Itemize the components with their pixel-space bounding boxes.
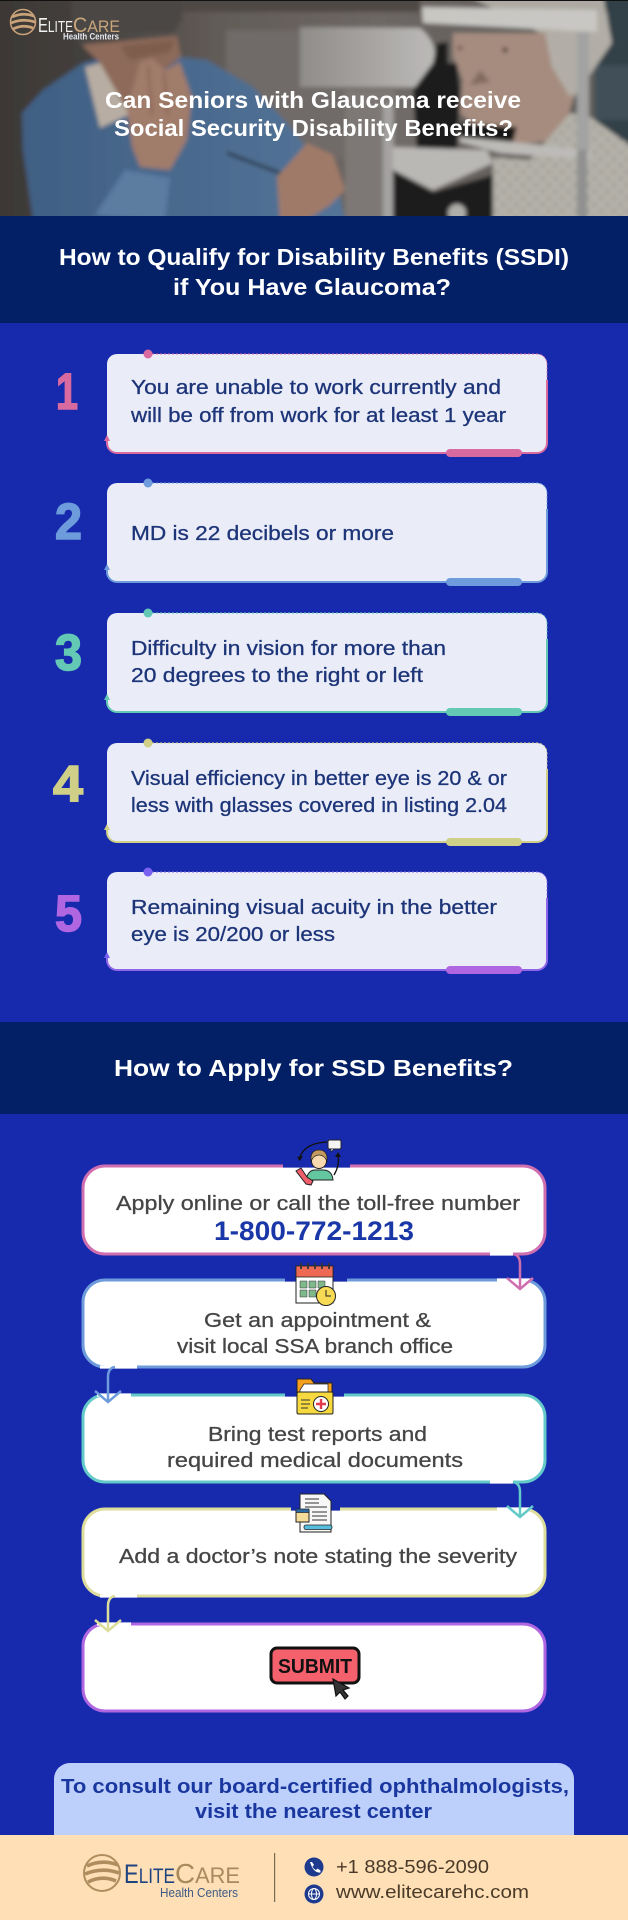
arrow: step 3 to step 4 — [507, 1482, 533, 1517]
qualification 2: 2 — [55, 493, 82, 550]
qualification 4: less with glasses covered in listing 2.04 — [131, 795, 507, 817]
qualification 2: MD is 22 decibels or more — [131, 523, 394, 545]
qualification 3: 20 degrees to the right or left — [131, 665, 423, 687]
man sweater — [22, 50, 345, 221]
step 3: documents: Bring test reports and — [208, 1423, 427, 1446]
step 4: doctor's note — [83, 1494, 545, 1596]
footer logo: CARE — [175, 1858, 240, 1889]
tube — [300, 27, 435, 87]
qualification 5: Remaining visual acuity in the better — [131, 897, 497, 919]
qualification 4: 4 — [53, 755, 84, 812]
icon: call agent — [296, 1140, 341, 1185]
woman face — [453, 33, 577, 146]
header photo banner — [0, 0, 628, 222]
step 2: appointment — [83, 1263, 545, 1367]
step 5: submit — [83, 1624, 545, 1711]
woman hair — [467, 0, 612, 100]
header logo: ELITE — [38, 15, 73, 37]
footer: www.elitecarehc.com — [335, 1882, 529, 1902]
qualification 1: will be off from work for at least 1 year — [130, 405, 506, 427]
footer: +1 888-596-2090 — [336, 1857, 489, 1877]
section band: how to qualify: if You Have Glaucoma? — [173, 274, 451, 300]
man hand at face — [127, 58, 192, 170]
step 1: apply — [83, 1140, 545, 1254]
section band: how to apply — [0, 1022, 628, 1114]
qualification 5 — [55, 868, 547, 974]
icon: calendar — [296, 1263, 336, 1306]
qualification 2 — [55, 478, 547, 586]
call to action box: To consult our board-certified ophthalmologists, — [61, 1775, 569, 1798]
header logo — [10, 10, 120, 42]
woman shirt — [493, 113, 628, 221]
qualification 4 — [53, 738, 547, 846]
footer logo — [84, 1855, 240, 1900]
title: Social Security Disability Benefits? — [114, 115, 513, 141]
qualification 4: Visual efficiency in better eye is 20 & or — [131, 768, 507, 790]
title — [105, 87, 521, 141]
qualification 1: You are unable to work currently and — [131, 377, 501, 399]
footer logo: ELITE — [124, 1859, 175, 1889]
section band: how to qualify: How to Qualify for Disability Benefits (SSDI) — [59, 244, 569, 270]
icon: submit button — [271, 1648, 359, 1699]
footer logo: Health Centers — [160, 1886, 238, 1900]
call to action box — [54, 1763, 574, 1835]
qualification 3: 3 — [55, 624, 82, 681]
header logo: CARE — [73, 14, 120, 37]
icon: submit button: SUBMIT — [278, 1656, 352, 1678]
step 2: appointment: visit local SSA branch office — [177, 1335, 453, 1358]
icon: phone — [304, 1858, 324, 1876]
footer — [0, 1835, 628, 1920]
section band: how to qualify — [0, 216, 628, 323]
step 2: appointment: Get an appointment & — [204, 1309, 431, 1332]
arrow: step 2 to step 3 — [95, 1367, 121, 1402]
qualification 3 — [55, 608, 547, 716]
qualification 5: 5 — [55, 885, 82, 942]
qualification 1: 1 — [56, 363, 78, 420]
step 3: documents — [83, 1379, 545, 1482]
icon: medical folder — [297, 1379, 333, 1414]
arrow: step 1 to step 2 — [507, 1254, 533, 1289]
right background — [597, 0, 628, 155]
step 4: doctor's note: Add a doctor’s note stating the severity — [119, 1545, 518, 1568]
man head — [80, 36, 181, 110]
icon: doctor's note — [296, 1494, 332, 1532]
step 1: apply: 1-800-772-1213 — [214, 1216, 414, 1246]
section band: how to apply: How to Apply for SSD Benefits? — [114, 1055, 513, 1081]
call to action box: visit the nearest center — [195, 1800, 432, 1823]
step 1: apply: Apply online or call the toll-free number — [116, 1192, 520, 1215]
man right hand — [277, 143, 345, 221]
man hair — [72, 0, 182, 45]
qualification 3: Difficulty in vision for more than — [131, 638, 446, 660]
step 3: documents: required medical documents — [167, 1449, 463, 1472]
icon: globe — [304, 1884, 324, 1904]
arrow: step 4 to step 5 — [95, 1596, 121, 1631]
qualification 5: eye is 20/200 or less — [131, 924, 335, 946]
stand — [413, 42, 460, 153]
man collar — [85, 63, 133, 128]
header logo: Health Centers — [63, 32, 119, 42]
qualification 1 — [56, 350, 547, 457]
title: Can Seniors with Glaucoma receive — [105, 87, 521, 113]
